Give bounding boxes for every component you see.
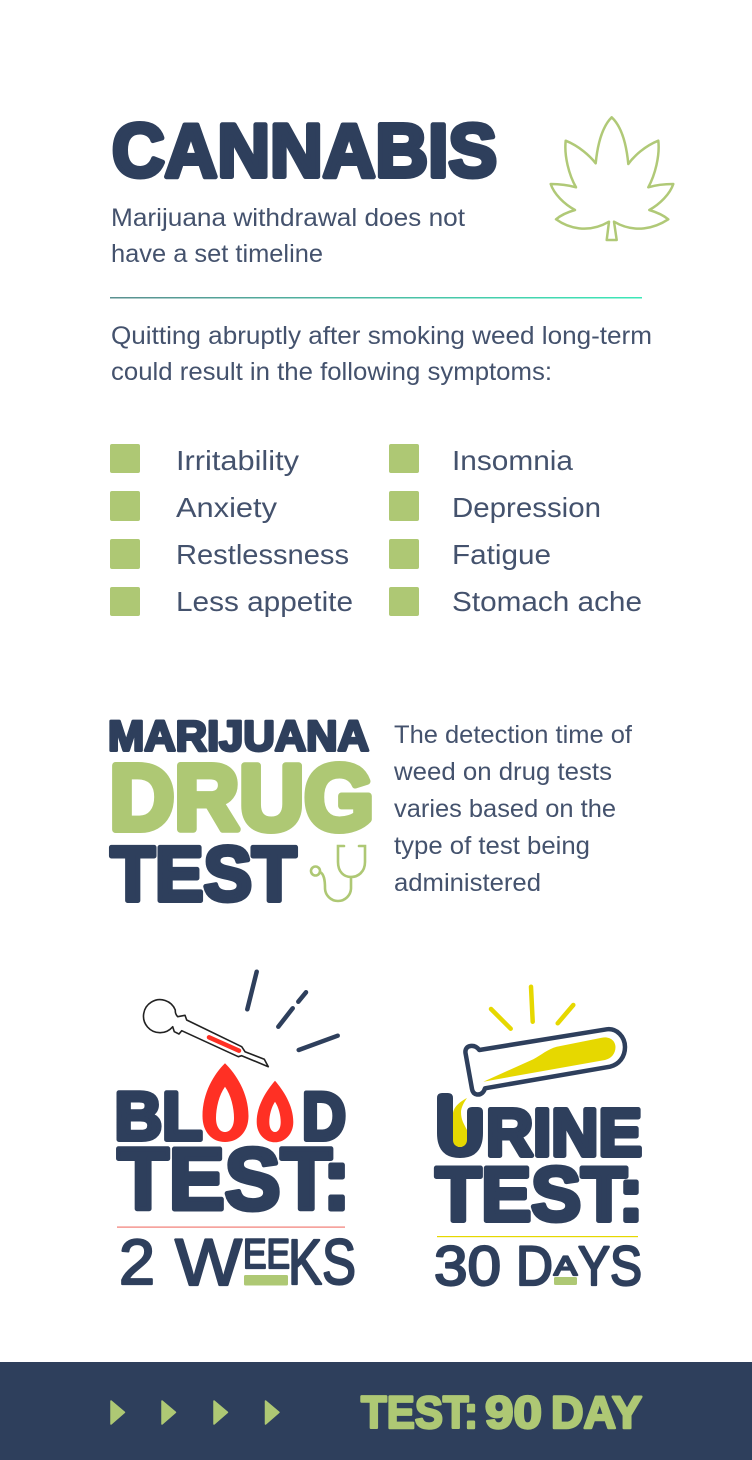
intro text block: Quitting abruptly after smoking weed long-term [111,322,652,350]
icon: test tube [465,1029,625,1095]
symptom: less appetite [110,586,353,617]
result: 2 weeks: 2 [119,1226,155,1298]
footer heading: test 90 day: TEST: [361,1387,478,1438]
heading: marijuana drug test: DRUG [110,746,374,850]
symptom: anxiety [110,491,277,523]
symptom: fatigue: Fatigue [452,539,551,570]
panel: blood test [114,972,356,1299]
drug test description: type of test being [394,832,590,860]
heading: blood: BL [114,1078,202,1154]
heading: marijuana drug test: MARIJUANA [108,712,369,760]
result: 30 days: A [554,1251,577,1281]
result: 30 days [434,1234,642,1297]
symptom: irritability: Irritability [176,445,299,476]
footer heading: test 90 day [361,1387,642,1438]
subtitle text block [111,204,465,268]
heading: blood: D [302,1078,346,1154]
panel: urine test [434,987,644,1297]
subtitle text block: have a set timeline [111,240,323,268]
heading letter: U with yellow fill [437,1093,483,1158]
icon: large blood drop [202,1063,248,1142]
icon: dropper [143,1000,268,1067]
drug test description: The detection time of [394,721,632,749]
result: 2 weeks: EE [243,1230,290,1277]
symptom: restlessness [110,539,349,570]
symptom: anxiety: Anxiety [176,492,277,523]
symptom: insomnia [389,444,573,476]
heading: test: TEST: [118,1131,350,1228]
icon: arrow markers [111,1401,279,1424]
panel: symptoms list [110,444,642,617]
heading: marijuana drug test: TEST [110,832,296,918]
intro text block: could result in the following symptoms: [111,358,552,386]
symptom: depression [389,491,601,523]
drug test description [393,721,632,897]
intro text block [111,322,652,386]
drug test description: varies based on the [394,795,616,823]
icon: small blood drop [257,1081,293,1142]
drug test description: administered [394,869,541,897]
symptom: insomnia: Insomnia [452,445,573,476]
symptom: less appetite: Less appetite [176,586,353,617]
icon: impact rays [247,972,338,1050]
icon: cannabis leaf [551,117,673,240]
icon: yellow rays [491,987,573,1029]
subtitle text block: Marijuana withdrawal does not [111,204,465,232]
result: 30 days: 30 [434,1234,501,1297]
result: 2 weeks [119,1225,356,1299]
result: 2 weeks: W [175,1225,243,1299]
title: cannabis: CANNABIS [112,110,497,194]
result: 2 weeks: KS [288,1226,356,1298]
symptom: fatigue [389,539,551,570]
result: 30 days: YS [578,1234,642,1297]
icon: stethoscope [311,846,365,901]
symptom: stomach ache: Stomach ache [452,586,642,617]
drug test description: weed on drug tests [393,758,612,786]
symptom: depression: Depression [452,492,601,523]
footer heading: test 90 day: DAY [551,1387,642,1438]
heading: marijuana drug test [108,712,374,918]
footer band [0,1362,752,1460]
heading: test: TEST: [436,1152,644,1238]
heading: rine: RINE [486,1096,642,1170]
footer heading: test 90 day: 90 [485,1387,542,1438]
symptom: irritability [110,444,299,476]
symptom: restlessness: Restlessness [176,539,349,570]
result: 30 days: D [516,1234,553,1297]
heading: blood [114,1078,346,1154]
